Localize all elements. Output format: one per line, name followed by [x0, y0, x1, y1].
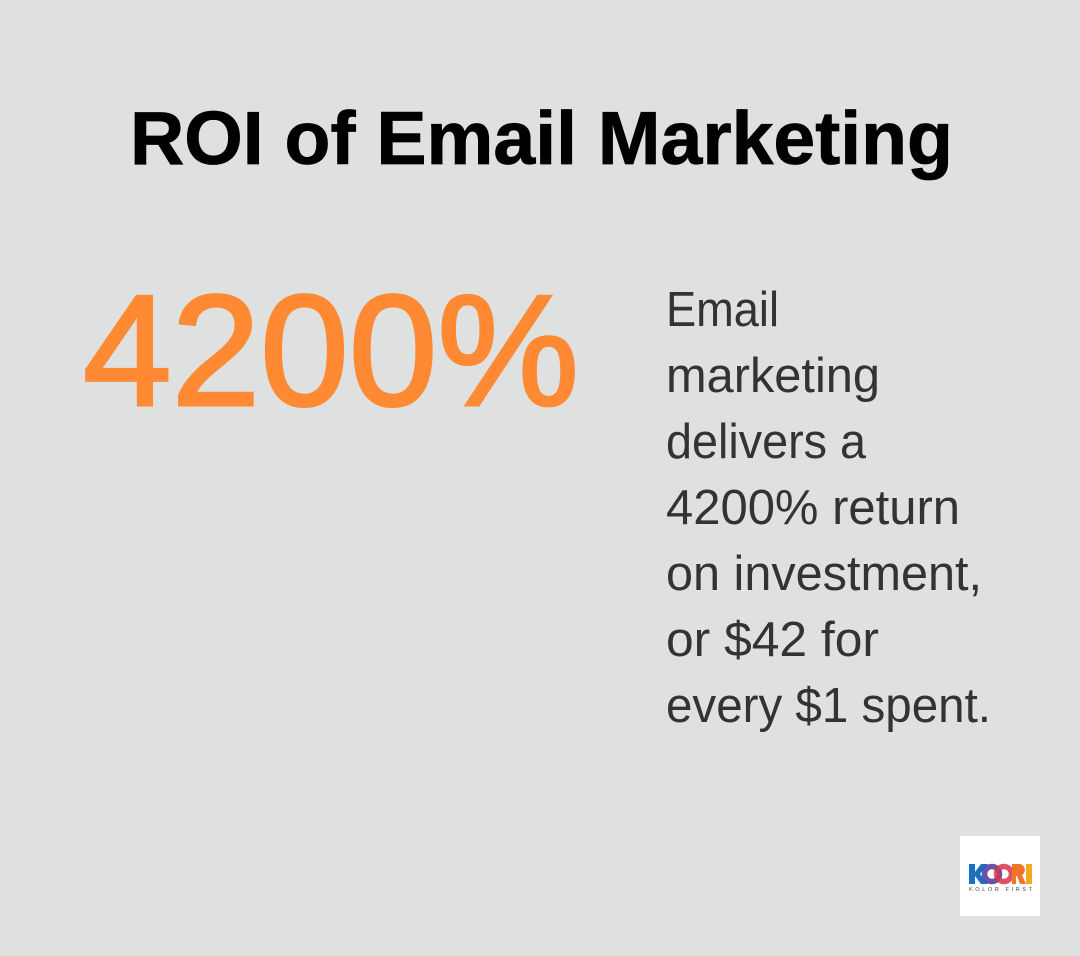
description text block: delivers a: [666, 415, 867, 469]
description text block: marketing: [666, 349, 880, 403]
logo letter rings O O: [984, 866, 1012, 882]
description text block: on investment,: [666, 547, 982, 601]
logo letter K: [969, 864, 988, 884]
logo tagline: KOLOR FIRST: [969, 887, 1033, 893]
title: ROI of Email Marketing: [130, 96, 953, 180]
description text block: 4200% return: [666, 481, 960, 535]
description text block: every $1 spent.: [666, 679, 991, 733]
description text block: Email: [666, 283, 779, 337]
description text block: [666, 283, 991, 733]
logo letter R and 1: [1012, 864, 1032, 884]
big stat: 4200%: 4200%: [83, 263, 579, 439]
logo: KOOR1 Kolor First: [960, 836, 1040, 916]
description text block: or $42 for: [666, 613, 879, 667]
